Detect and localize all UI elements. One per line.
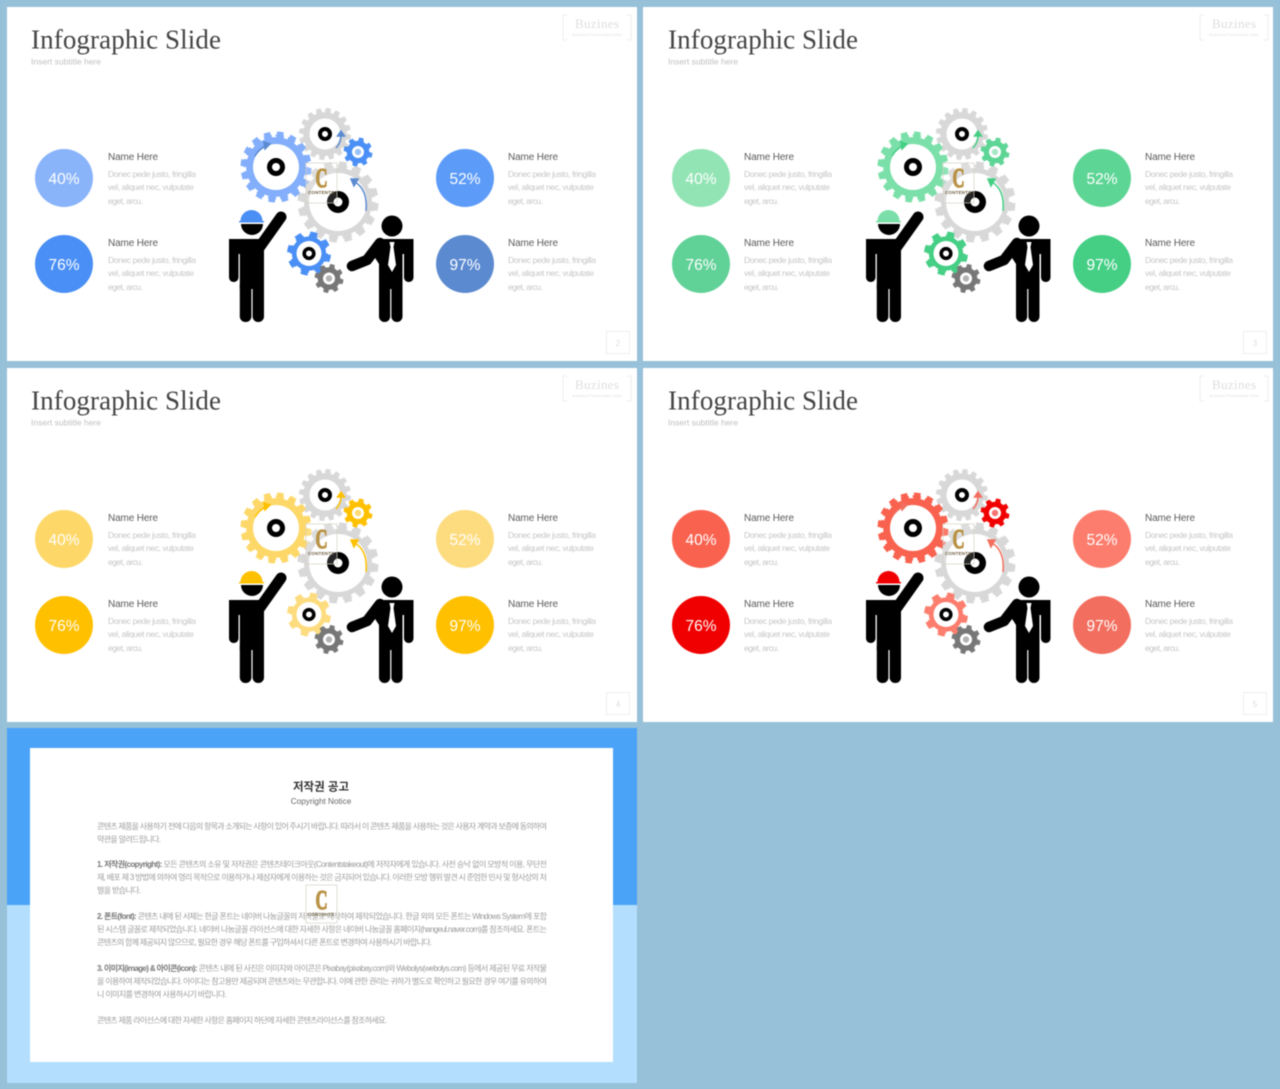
man with raised arm [229,217,281,322]
item: 76%: 76% [48,618,80,635]
item: 40%: 40% [685,532,717,549]
item: 97%: 97% [1086,257,1118,274]
item: 40% [35,149,196,207]
notice heading: 저작권 공고 [293,780,349,794]
logo [563,376,631,401]
subtitle: Insert subtitle here [31,56,101,66]
item: 52%: eget, arcu. [1145,196,1180,206]
item: 52%: vel, aliquet nec, vulputate [508,543,594,553]
watermark: C [315,885,328,915]
notice section: image and icon: 을 이용하여 제작되었습니다. 아이디는 참고용만 제공되며 콘텐츠와는 무관합니다. 이에 관한 권리는 귀하가 별도로 확인하고 필요한 경우 여기를 유의하여 [97,976,547,986]
item: 40% [672,149,832,207]
man in tie [989,216,1050,322]
item: 97%: Donec pede justo, fringilla [508,616,596,626]
gear: small top right [345,139,371,165]
item: 52%: Name Here [1145,152,1195,163]
man with raised arm [229,578,281,683]
item: 52%: vel, aliquet nec, vulputate [1145,182,1231,192]
item: 76%: 76% [685,257,717,274]
item: 40%: eget, arcu. [744,196,779,206]
gear: lower coloured [289,233,329,274]
panel: copyright notice slide [7,728,637,1083]
item: 52%: vel, aliquet nec, vulputate [1145,543,1231,553]
item: 76%: 76% [685,618,717,635]
item: 40%: Donec pede justo, fringilla [108,530,196,540]
logo: Buzines [1212,377,1256,392]
page number: 4 [616,700,621,709]
gear: small dark grey [316,265,342,292]
gear: large grey [299,524,377,602]
subtitle: Insert subtitle here [668,56,738,66]
hard hat [239,210,264,222]
man in tie [989,576,1050,683]
watermark: C [315,163,328,193]
item: 97%: Name Here [1145,238,1195,249]
illustration: gears and two men [866,470,1050,683]
item: 97%: 97% [1086,618,1118,635]
man with raised arm [866,217,918,322]
item: 97%: Name Here [508,238,558,249]
item: 97%: Name Here [1145,599,1195,610]
panel: blue infographic slide [7,7,637,361]
item: 97% [1073,596,1233,654]
item: 76%: eget, arcu. [744,282,779,292]
logo [563,15,631,40]
notice closing: 콘텐츠 제품 라이선스에 대한 자세한 사항은 홈페이지 하단에 자세한 콘텐츠라이선스를 참조하세요. [97,1015,387,1025]
item: 40%: vel, aliquet nec, vulputate [744,182,830,192]
logo [1200,376,1268,401]
watermark [306,885,337,923]
arrows [255,131,366,211]
logo: Business Presentation Slide [1209,393,1260,398]
page number: 5 [1253,700,1258,709]
item: 52%: Donec pede justo, fringilla [508,530,596,540]
item: 76%: Donec pede justo, fringilla [108,616,196,626]
notice section: image and icon: 3. 이미지(image) & 아이콘(icon): 콘텐츠 내에 된 사진은 이미지와 아이콘은 Pixabay(pixabay.com)와 Webolys(webolys.com) 등에서 제공된 무료 저작물 [97,963,547,973]
page number [606,332,630,354]
gear: large grey [299,163,377,241]
logo: Business Presentation Slide [572,393,623,398]
notice section: copyright: 재, 배포 제 3 방법에 의하여 영리 목적으로 이용하거나 제삼자에게 이용하는 것은 금지되어 있습니다. 이러한 모방 행위 발견 시 준엄한 민사 및 형사상의 처 [97,872,547,882]
item: 76%: Donec pede justo, fringilla [744,616,832,626]
item: 76%: eget, arcu. [108,643,143,653]
item: 97%: Donec pede justo, fringilla [1145,616,1233,626]
page number [1244,332,1266,354]
item: 52%: Donec pede justo, fringilla [1145,530,1233,540]
item: 76%: vel, aliquet nec, vulputate [744,629,830,639]
item: 76%: vel, aliquet nec, vulputate [108,268,194,278]
title: Infographic Slide [668,24,858,54]
gear: big coloured [879,133,947,201]
logo: Buzines [575,377,619,392]
gear: small top right [982,139,1008,165]
item: 40% [672,510,832,568]
watermark: CONTENTS [308,551,334,556]
item: 76%: 76% [48,257,80,274]
item: 76%: Name Here [744,599,794,610]
item: 40%: Name Here [744,513,794,524]
watermark: CONTENTS [945,551,971,556]
logo: Business Presentation Slide [572,32,623,37]
item: 76% [35,235,196,293]
watermark: C [952,524,965,554]
notice section: font [97,911,548,947]
gear: small top right [982,500,1008,526]
item: 40%: vel, aliquet nec, vulputate [744,543,830,553]
watermark [306,524,337,564]
gear: top grey [300,109,350,159]
man with raised arm [866,578,918,683]
item: 52%: Name Here [1145,513,1195,524]
item: 97%: eget, arcu. [508,282,543,292]
page number: 2 [616,339,621,348]
gear: big coloured [879,494,947,562]
title: Infographic Slide [31,386,221,416]
gear: top grey [300,470,350,520]
watermark [943,163,974,203]
illustration: gears and two men [229,109,414,322]
gear: small dark grey [953,626,979,653]
gear: large grey [936,524,1014,602]
item: 76%: Name Here [744,238,794,249]
item: 97% [436,235,596,293]
item: 52%: 52% [1086,171,1118,188]
item: 76%: eget, arcu. [744,643,779,653]
page number [1244,692,1266,714]
item: 76% [35,596,196,654]
item: 97%: vel, aliquet nec, vulputate [1145,268,1231,278]
panel: green infographic slide [643,7,1273,361]
notice intro [97,821,547,844]
item: 52%: eget, arcu. [508,557,543,567]
item: 76%: Donec pede justo, fringilla [108,255,196,265]
logo: Business Presentation Slide [1209,32,1260,37]
item: 40%: 40% [685,171,717,188]
item: 97% [436,596,596,654]
watermark [943,524,974,564]
item: 97%: eget, arcu. [1145,282,1180,292]
item: 97%: 97% [449,257,481,274]
item: 97%: eget, arcu. [508,643,543,653]
item: 76%: vel, aliquet nec, vulputate [108,629,194,639]
item: 40%: vel, aliquet nec, vulputate [108,543,194,553]
gear: small dark grey [953,265,979,292]
item: 40%: vel, aliquet nec, vulputate [108,182,194,192]
item: 52% [436,149,596,207]
watermark: C [315,524,328,554]
notice section: copyright: 벌을 받습니다. [97,885,141,895]
page number [606,692,630,714]
item: 52%: Donec pede justo, fringilla [1145,169,1233,179]
item: 97%: Name Here [508,599,558,610]
gear: lower coloured [926,233,966,274]
arrows [255,492,366,572]
item: 40%: Name Here [108,513,158,524]
item: 97%: vel, aliquet nec, vulputate [1145,629,1231,639]
item: 52%: 52% [1086,532,1118,549]
panel: yellow infographic slide [7,368,637,722]
item: 76%: Name Here [108,599,158,610]
item: 97%: eget, arcu. [1145,643,1180,653]
item: 76%: Donec pede justo, fringilla [744,255,832,265]
item: 52%: Name Here [508,152,558,163]
item: 76%: Name Here [108,238,158,249]
item: 76%: vel, aliquet nec, vulputate [744,268,830,278]
item: 76% [672,596,832,654]
item: 40%: eget, arcu. [108,196,143,206]
gear: top grey [937,470,987,520]
item: 40% [35,510,196,568]
title: Infographic Slide [668,386,858,416]
item: 76%: eget, arcu. [108,282,143,292]
logo [1200,15,1268,40]
item: 52%: Name Here [508,513,558,524]
notice section: font: 2. 폰트(font): 콘텐츠 내에 된 서체는 한글 폰트는 네이버 나눔글꼴의 저작물로 제작하여 제작되었습니다. 한글 외의 모든 폰트는 Windows System에 포함 [97,911,548,921]
item: 97%: Donec pede justo, fringilla [508,255,596,265]
gear: large grey [936,163,1014,241]
notice section: font: 된 시스템 글꼴로 제작되었습니다. 네이버 나눔글꼴 라이선스에 대한 자세한 사항은 네이버 나눔글꼴 홈페이지(hangeul.naver.com)를 참조하세요. 폰트는 [97,924,547,934]
item: 40%: Donec pede justo, fringilla [108,169,196,179]
item: 40%: Donec pede justo, fringilla [744,169,832,179]
subtitle: Insert subtitle here [31,418,101,428]
item: 52% [436,510,596,568]
gear: top grey [937,109,987,159]
item: 52% [1073,510,1233,568]
item: 52%: vel, aliquet nec, vulputate [508,182,594,192]
item: 40%: 40% [48,171,80,188]
watermark: CONTENTS [308,190,334,195]
item: 97%: vel, aliquet nec, vulputate [508,629,594,639]
illustration: gears and two men [229,470,414,683]
hard hat [239,571,264,584]
item: 76% [672,235,832,293]
gear: lower coloured [289,594,329,635]
watermark: CONTENTS [945,190,971,195]
item: 97%: Donec pede justo, fringilla [1145,255,1233,265]
gear: small top right [345,500,371,526]
logo: Buzines [1212,16,1256,31]
item: 52%: eget, arcu. [508,196,543,206]
item: 40%: 40% [48,532,80,549]
gear: big coloured [242,133,310,201]
item: 40%: eget, arcu. [744,557,779,567]
notice section: copyright [97,859,547,895]
item: 52%: 52% [449,171,481,188]
watermark: CONTENTS [308,912,334,917]
subtitle: Insert subtitle here [668,418,738,428]
man in tie [352,576,414,683]
item: 52%: eget, arcu. [1145,557,1180,567]
watermark [306,163,337,203]
notice intro: 약관을 알려드립니다. [97,834,161,844]
notice section: image and icon [97,963,547,999]
gear: big coloured [242,494,310,562]
title: Infographic Slide [31,24,221,54]
watermark: C [952,163,965,193]
item: 40%: eget, arcu. [108,557,143,567]
man in tie [352,216,414,322]
item: 97%: 97% [449,618,481,635]
hard hat [876,571,901,584]
item: 40%: Donec pede justo, fringilla [744,530,832,540]
item: 40%: Name Here [744,152,794,163]
illustration: gears and two men [866,109,1050,322]
hard hat [876,210,901,222]
panel: red infographic slide [643,368,1273,722]
arrows [892,492,1003,572]
item: 52%: 52% [449,532,481,549]
notice section: font: 콘텐츠의 함께 제공되지 않으므로, 필요한 경우 해당 폰트를 구입하셔서 다른 폰트로 변경하여 사용하시기 바랍니다. [97,937,432,947]
arrows [892,131,1003,211]
item: 52% [1073,149,1233,207]
item: 97% [1073,235,1233,293]
page number: 3 [1253,339,1258,348]
item: 52%: Donec pede justo, fringilla [508,169,596,179]
notice intro: 콘텐츠 제품을 사용하기 전에 다음의 항목과 소개되는 사항이 있어 주시기 바랍니다. 따라서 이 콘텐츠 제품을 사용하는 것은 사용자 계약과 보증에 동의하여 [97,821,547,831]
notice section: copyright: 1. 저작권(copyright): 모든 콘텐츠의 소유 및 저작권은 콘텐츠테이크아웃(Contentstakeout)에 저작자에게 있습니다. 사전 승낙 없이 모방적 이용, 무단전 [97,859,547,869]
logo: Buzines [575,16,619,31]
item: 40%: Name Here [108,152,158,163]
notice subheading: Copyright Notice [291,797,352,806]
gear: lower coloured [926,594,966,635]
notice section: image and icon: 니 이미지를 변경하여 사용하시기 바랍니다. [97,989,227,999]
gear: small dark grey [316,626,342,653]
item: 97%: vel, aliquet nec, vulputate [508,268,594,278]
